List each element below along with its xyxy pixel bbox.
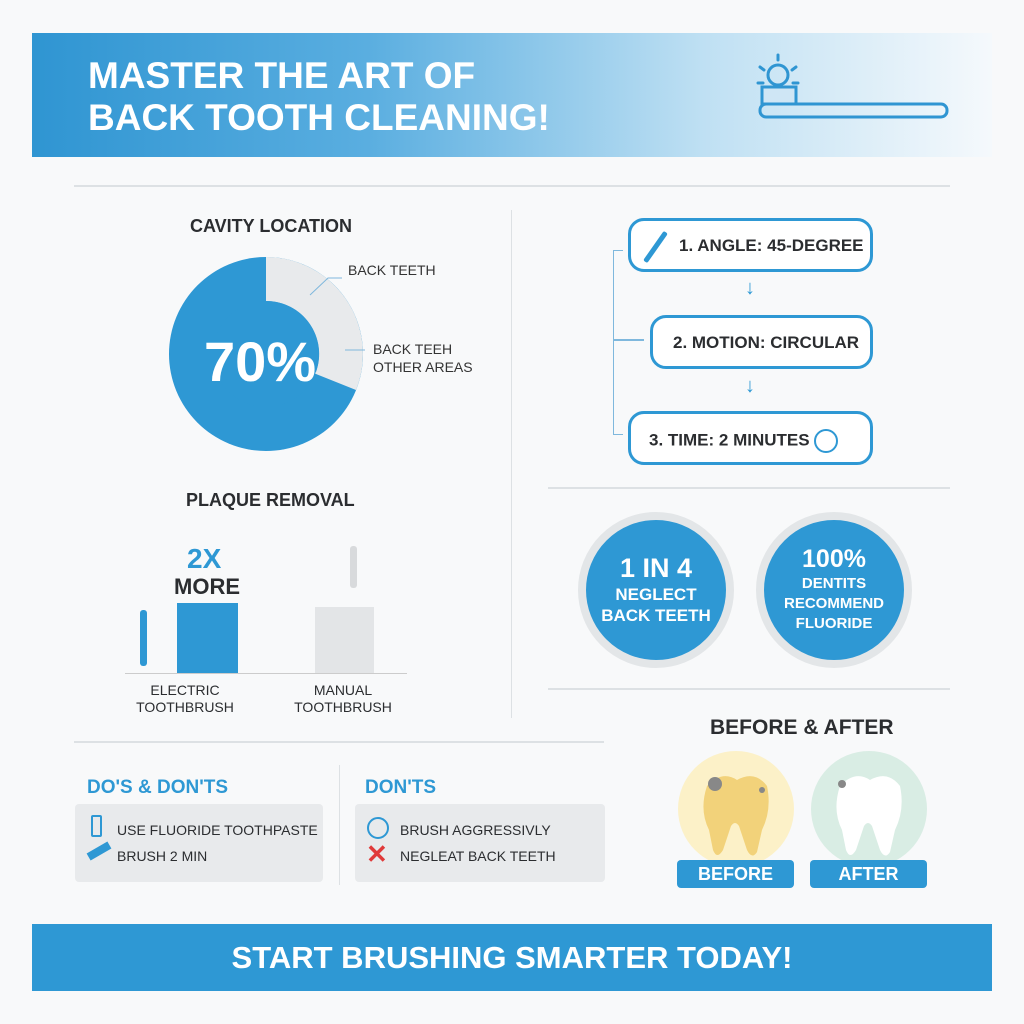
title [88, 55, 550, 138]
label after [810, 860, 927, 888]
donts panel: BRUSH AGGRESSIVLY [400, 822, 551, 838]
before and after [677, 716, 927, 888]
step 1 [628, 218, 873, 272]
bar chart: TOOTHBRUSH [294, 699, 392, 715]
donts panel: NEGLEAT BACK TEETH [400, 848, 556, 864]
pie chart: OTHER AREAS [373, 359, 473, 375]
bar chart [125, 543, 407, 715]
stat circle: 100%: 100% [802, 545, 866, 573]
stat circle: 100%: FLUORIDE [796, 615, 872, 632]
stat circle: 1 in 4: NEGLECT [615, 585, 697, 604]
step 1: 1. ANGLE: 45-DEGREE [679, 236, 864, 255]
pie chart: BACK TEEH [373, 341, 452, 357]
heading: plaque removal: PLAQUE REMOVAL [186, 490, 355, 510]
bar chart: MORE [174, 574, 240, 599]
label before: BEFORE [698, 864, 773, 884]
title: BACK TOOTH CLEANING! [88, 97, 550, 138]
step 2 [650, 315, 873, 369]
flow steps: ↓ [745, 277, 755, 299]
dos and donts panel [75, 777, 323, 882]
heading: cavity location: CAVITY LOCATION [190, 216, 352, 236]
donts panel [355, 777, 605, 882]
icon: manual toothbrush [350, 546, 357, 588]
icon: toothbrush [756, 54, 948, 118]
label after: AFTER [838, 864, 898, 884]
stat circle: 100%: DENTITS [802, 575, 866, 592]
icon: electric toothbrush [140, 610, 147, 666]
dos and donts panel: BRUSH 2 MIN [117, 848, 207, 864]
bar chart: TOOTHBRUSH [136, 699, 234, 715]
donts panel: DON'TS [365, 777, 436, 798]
label before [677, 860, 794, 888]
pie chart: BACK TEETH [348, 262, 436, 278]
footer banner: START BRUSHING SMARTER TODAY! [232, 940, 792, 975]
tooth before [678, 751, 794, 860]
tooth after [811, 751, 927, 860]
donts panel: ✕ [366, 839, 388, 869]
stat circle: 100% [756, 512, 912, 668]
bar chart: 2X [187, 543, 221, 574]
flow steps: ↓ [745, 375, 755, 397]
before and after: BEFORE & AFTER [710, 716, 894, 739]
dos and donts panel: USE FLUORIDE TOOTHPASTE [117, 822, 318, 838]
step 3 [628, 411, 873, 465]
title: MASTER THE ART OF [88, 55, 475, 96]
bar chart: ELECTRIC [150, 682, 220, 698]
stat circle: 100%: RECOMMEND [784, 595, 884, 612]
pie chart [169, 257, 473, 451]
flow steps [613, 218, 873, 465]
stat circle: 1 in 4 [578, 512, 734, 668]
footer banner [32, 924, 992, 991]
step 2: 2. MOTION: CIRCULAR [673, 333, 859, 352]
pie chart: 70% [204, 330, 316, 393]
header banner [32, 33, 992, 157]
dos and donts panel: DO'S & DON'TS [87, 777, 228, 798]
step 3: 3. TIME: 2 MINUTES [649, 430, 810, 449]
bar chart: MANUAL [314, 682, 372, 698]
stat circle: 1 in 4: 1 IN 4 [620, 553, 692, 583]
stat circle: 1 in 4: BACK TEETH [601, 606, 711, 625]
